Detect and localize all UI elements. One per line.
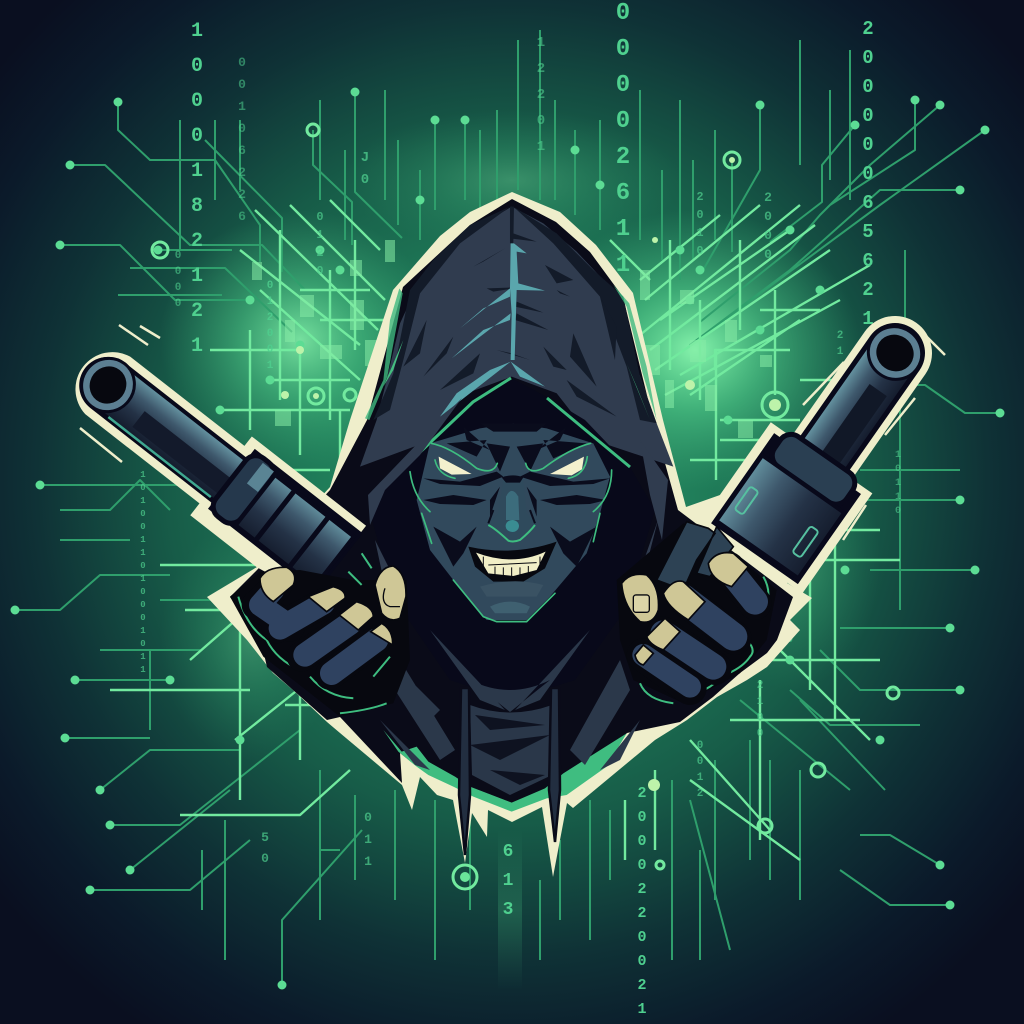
- left fingers outline: [257, 587, 377, 675]
- barrel: [800, 345, 911, 474]
- dark inner hood opening: [372, 378, 655, 700]
- binary rain: large columns: 2010: [693, 190, 707, 262]
- gun black edge: [711, 298, 956, 584]
- binary rain: large columns: 012001: [264, 280, 276, 376]
- circuit rings: [152, 124, 899, 869]
- binary rain: large columns: 613: [498, 842, 518, 929]
- binary rain: large columns: 1000182121: [186, 20, 208, 370]
- binary rain: large columns: 10110: [892, 450, 904, 520]
- binary rain: large columns: 21: [834, 330, 846, 362]
- background glows: [160, 110, 880, 990]
- green hood edge: [380, 378, 630, 490]
- hood strings: [459, 688, 470, 855]
- collar: [767, 429, 860, 509]
- left glove green edge: [238, 553, 390, 713]
- face shadows: [423, 423, 610, 567]
- left glove base: [230, 570, 410, 717]
- collar: [208, 450, 279, 528]
- left thumb line: [383, 588, 400, 607]
- face mask: [417, 423, 610, 620]
- green lower band: [383, 730, 627, 812]
- teal seam and barbs: [440, 243, 545, 417]
- binary rain: large columns: 2000: [760, 190, 776, 266]
- binary rain: large columns: 0012: [694, 740, 706, 804]
- muzzle: [858, 316, 932, 390]
- gun outline: [701, 287, 967, 593]
- binary rain: large columns: 011: [360, 810, 376, 876]
- right hand: [617, 522, 777, 703]
- binary rain: large columns: 00106226: [234, 55, 250, 231]
- brow lines: [410, 443, 612, 622]
- binary rain: large columns: 1010011010001011: [138, 470, 148, 678]
- left gun motion lines: [80, 325, 160, 462]
- nose: [488, 475, 537, 542]
- eyes: [439, 457, 584, 475]
- left hand: [230, 553, 410, 717]
- binary rain: large columns: 00002611: [610, 0, 636, 288]
- right gun: [701, 287, 967, 593]
- body drapes and chest: [368, 378, 668, 855]
- gun body: [716, 455, 844, 578]
- hood shadows: [373, 207, 657, 423]
- grip: [657, 522, 733, 590]
- hood side green: [383, 340, 650, 420]
- hood fabric: [360, 207, 673, 467]
- mouth: [468, 542, 557, 613]
- hood left green edge: [365, 288, 403, 420]
- binary rain: large columns: J0: [357, 150, 373, 194]
- circuit traces: bright inner: [110, 200, 900, 860]
- binary rain: large columns: 12201: [533, 35, 549, 165]
- chest panel: [470, 705, 552, 795]
- right gun motion lines: [803, 325, 945, 540]
- binary rain: large columns: 2100: [754, 680, 766, 744]
- circuit node centres: [281, 157, 781, 791]
- left fingers: [260, 590, 377, 673]
- muzzle: [71, 348, 145, 422]
- binary rain: large columns: 0120: [313, 210, 327, 282]
- binary rain: large columns: 0000: [172, 250, 184, 314]
- bottom ring node: [453, 865, 477, 889]
- right thumb nail line: [633, 595, 649, 612]
- hood side folds: [368, 398, 668, 610]
- right fingernails: [622, 553, 748, 665]
- hood right green edge: [613, 285, 657, 420]
- binary rain: large columns: 2000220021: [634, 785, 650, 1024]
- body and hood base: [230, 199, 793, 803]
- binary rain: large columns: 50: [258, 830, 272, 872]
- hood: [360, 207, 673, 467]
- right fingers: [643, 568, 755, 687]
- left gun: [52, 328, 368, 606]
- binary rain: large columns: 0101110: [232, 460, 244, 558]
- cloth folds: [380, 630, 640, 770]
- left fingernails: [260, 566, 406, 645]
- barrel: [100, 371, 249, 502]
- gun black edge: [63, 336, 363, 593]
- character outline: cream silhouette: [207, 192, 843, 877]
- data blocks in the glow: [252, 240, 819, 524]
- binary rain: large columns: 20000065621: [857, 18, 879, 337]
- binary rain: large columns: 0010: [784, 590, 796, 650]
- right glove base: [617, 523, 777, 703]
- face: [410, 423, 612, 622]
- right fingers outline: [643, 568, 755, 688]
- binary rain: large columns: [138, 0, 904, 1024]
- gun body: [236, 475, 354, 587]
- gun outline: [52, 328, 366, 605]
- right glove green edge: [640, 577, 768, 703]
